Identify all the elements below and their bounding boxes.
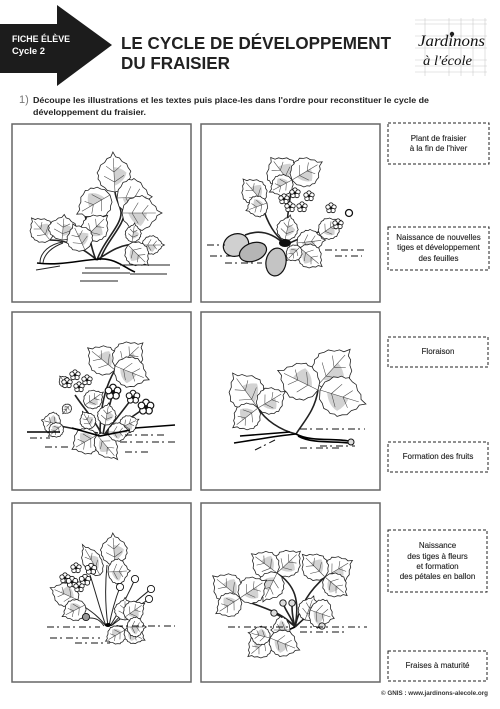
title	[121, 32, 391, 73]
label: naissance des tiges à fleurs: et formation	[416, 562, 459, 571]
label: fraises à maturité	[388, 651, 487, 681]
label: naissance des tiges à fleurs	[388, 530, 487, 592]
footer credit: © GNIS : www.jardinons-alecole.org	[381, 689, 488, 697]
logo: Jardinons à l'école: Jardinons	[418, 33, 485, 50]
label: plant de fraisier: Plant de fraisier	[411, 134, 467, 143]
instruction: 1)	[19, 94, 29, 106]
label: naissance des tiges à fleurs: Naissance	[419, 541, 457, 550]
panel: flower stems with balloon petals illustration	[12, 503, 191, 682]
label: floraison: Floraison	[422, 347, 454, 356]
label: formation des fruits: Formation des fruits	[403, 452, 473, 461]
label: naissance des tiges à fleurs: des pétales en ballon	[400, 572, 475, 581]
header arrow: fiche élève: FICHE ÉLÈVE	[12, 34, 70, 44]
panel: flowering illustration	[12, 312, 191, 490]
instruction	[19, 94, 429, 117]
panel: young plant with new leaves illustration	[201, 312, 380, 490]
logo: Jardinons à l'école: à l'école	[423, 54, 472, 69]
label: naissance de nouvelles tiges	[388, 227, 489, 270]
panel: strawberries at maturity illustration	[201, 124, 380, 302]
panel: plant at end of winter illustration	[12, 124, 191, 302]
panel: flowering plant with buds illustration	[201, 503, 380, 682]
label: floraison	[388, 337, 488, 367]
label: plant de fraisier: à la fin de l'hiver	[410, 144, 468, 153]
title: DU FRAISIER	[121, 53, 230, 73]
label: naissance des tiges à fleurs: des tiges à fleurs	[407, 552, 468, 561]
logo: Jardinons à l'école	[415, 18, 487, 76]
label: fraises à maturité: Fraises à maturité	[405, 661, 470, 670]
instruction: Découpe les illustrations et les textes puis place-les dans l'ordre pour reconstituer le cycle de	[33, 95, 429, 105]
title: LE CYCLE DE DÉVELOPPEMENT	[121, 32, 391, 53]
header arrow: fiche élève: Cycle 2	[12, 46, 45, 56]
label: plant de fraisier	[388, 123, 489, 164]
header arrow: fiche élève	[0, 5, 112, 86]
instruction: développement du fraisier.	[33, 107, 146, 117]
label: naissance de nouvelles tiges: tiges et développement	[397, 243, 481, 252]
label: formation des fruits	[388, 442, 488, 472]
label: naissance de nouvelles tiges: des feuilles	[418, 254, 459, 263]
label: naissance de nouvelles tiges: Naissance de nouvelles	[396, 233, 481, 242]
